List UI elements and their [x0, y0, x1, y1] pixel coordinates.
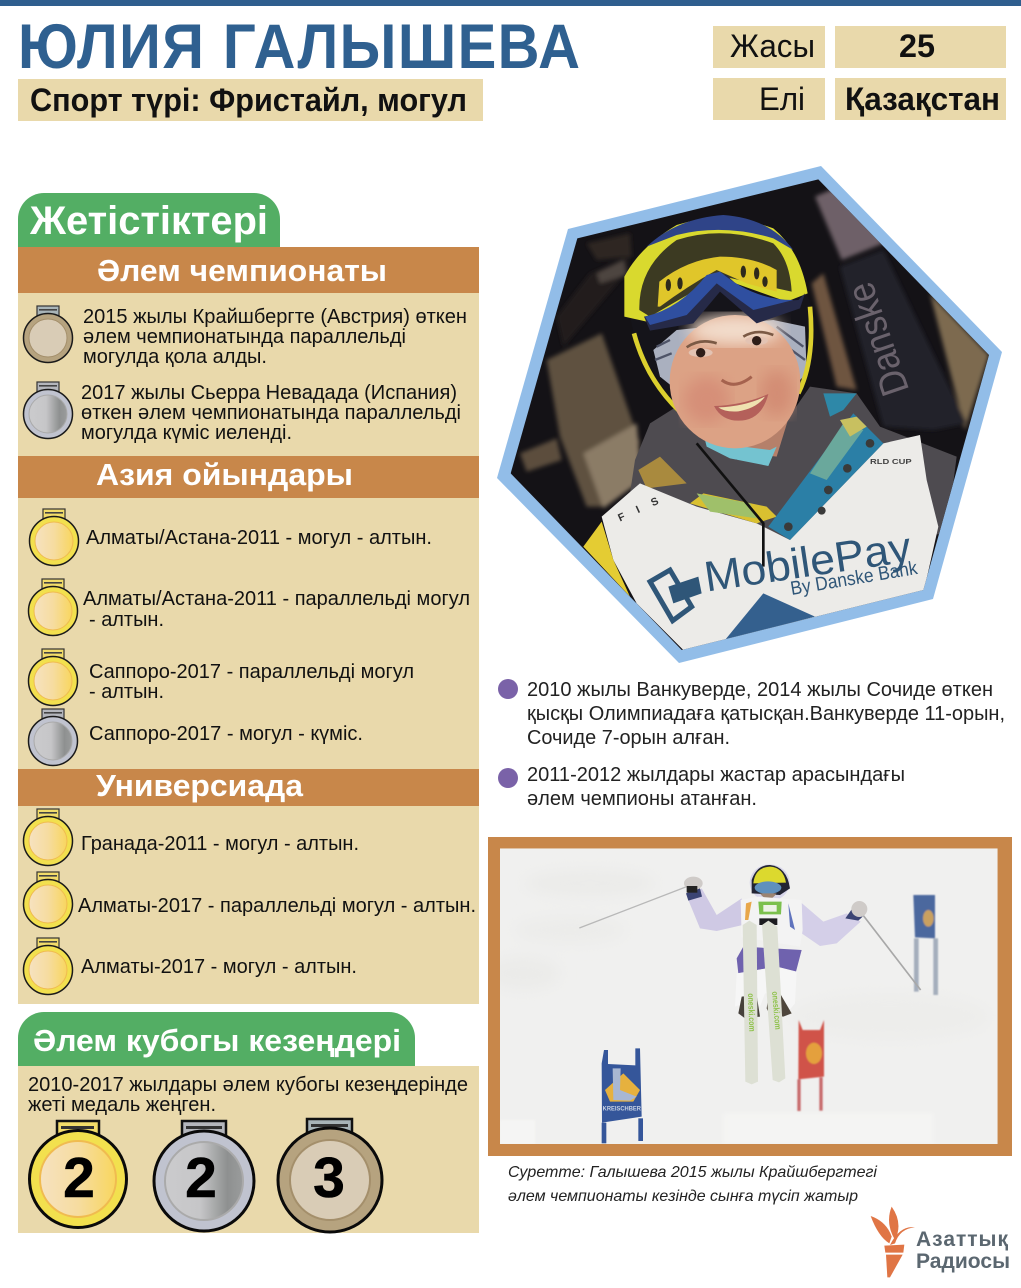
text: 2017 championship: өткен әлем чемпионатында параллельді [81, 402, 461, 424]
panel: achievements [18, 193, 479, 1004]
text: Sapporo parallel: Саппоро-2017 - параллельді могул [89, 661, 414, 683]
poles [579, 887, 687, 928]
section heading: Asian Games: Азия ойындары [96, 457, 353, 492]
text: 2015 championship: могулда қола алды. [83, 346, 267, 368]
heading tab: world cup: Әлем кубогы кезеңдері [33, 1023, 401, 1058]
text: world cup summary [28, 1074, 468, 1116]
medal: silver [28, 709, 78, 766]
medal: gold [28, 579, 78, 636]
text: Granada: Гранада-2011 - могул - алтын. [81, 833, 359, 855]
section heading: Universiade [18, 768, 479, 806]
pants [737, 947, 802, 973]
photo caption [508, 1164, 877, 1205]
info table: age and country: Қазақстан [845, 81, 1000, 117]
panel background [18, 293, 479, 1004]
ski branding: oneski.com [746, 993, 757, 1032]
text: 2017 championship: могулда күміс иеленді. [81, 422, 292, 444]
text: Sapporo parallel: - алтын. [89, 681, 164, 703]
medal: gold [24, 938, 72, 994]
skis [743, 921, 758, 1084]
torso and bib [741, 897, 803, 947]
text: world cup summary: 2010-2017 жылдары әлем кубогы кезеңдерінде [28, 1074, 468, 1096]
panel: world cup stages [18, 1012, 479, 1233]
mask [705, 441, 777, 466]
portrait photo in hexagon frame: By Danske Bank [789, 558, 919, 600]
text: Sapporo mogul: Саппоро-2017 - могул - күміс. [89, 723, 363, 745]
action photo with orange frame [487, 837, 1012, 1156]
nose [722, 377, 752, 384]
bullet: olympics: 2010 жылы Ванкуверде, 2014 жылы Сочиде өткен [527, 679, 993, 701]
photo background [510, 179, 989, 650]
zipper [697, 443, 763, 567]
text: Almaty/Astana mogul: Алматы/Астана-2011 - могул - алтын. [86, 527, 432, 549]
helmet strap [634, 307, 811, 412]
info table: age and country: Елі [759, 81, 805, 117]
text: 2015 championship: 2015 жылы Крайшбергте (Австрия) өткен [83, 306, 467, 328]
heading tab: achievements: Жетістіктері [29, 199, 268, 243]
medal: 3 bronze: 3 [313, 1146, 345, 1210]
neck [746, 420, 788, 457]
portrait photo in hexagon frame: RLD CUP [870, 457, 912, 466]
medal: 2 gold [30, 1121, 126, 1228]
section heading: world championship: Әлем чемпионаты [97, 253, 387, 288]
boots [738, 995, 760, 1018]
sport subtitle: Спорт түрі: Фристайл, могул [30, 82, 467, 118]
info table: age and country: 25 [899, 28, 935, 64]
gate blue with k logo: KREISCHBER [603, 1107, 642, 1113]
bullet: junior world champion: әлем чемпионы атанған. [527, 788, 757, 810]
text: Almaty parallel: Алматы-2017 - параллельді могул - алтын. [78, 895, 476, 917]
section heading: Universiade: Универсиада [96, 768, 304, 803]
gate red [797, 1020, 824, 1111]
collar patterned flap [768, 413, 883, 540]
medal: 2 silver [154, 1121, 254, 1231]
bullet: junior world champion [498, 764, 905, 810]
medal: 2 silver: 2 [185, 1146, 217, 1210]
text: Almaty/Astana parallel: - алтын. [89, 609, 164, 631]
logo: Azattyq Radiosy [871, 1207, 1010, 1277]
medal: gold [24, 809, 72, 866]
skier: oneski.com [770, 991, 783, 1030]
text: 2017 championship [81, 382, 461, 444]
MobilePay logo and text: MobilePay [701, 523, 915, 602]
heading tab: world cup [18, 1012, 415, 1066]
photo caption: Суретте: Галышева 2015 жылы Крайшбергтегі [508, 1164, 877, 1181]
eyes and brows [689, 348, 713, 357]
text: Almaty mogul: Алматы-2017 - могул - алтын. [81, 956, 357, 978]
medal: 2 gold: 2 [63, 1146, 95, 1210]
text: Sapporo parallel [89, 661, 414, 703]
arms [688, 888, 743, 931]
skier [684, 864, 867, 1084]
section heading: Asian Games [18, 456, 479, 498]
headband [653, 320, 807, 390]
medal: bronze 2015 [24, 306, 72, 362]
bullet: olympics: Сочиде 7-орын алған. [527, 727, 730, 749]
medal: gold [28, 649, 78, 706]
bullet: olympics: қысқы Олимпиадаға қатысқан.Ванкуверде 11-орын, [527, 703, 1005, 725]
bullet: olympics [498, 679, 1005, 749]
logo: Azattyq Radiosy: Радиосы [916, 1250, 1010, 1273]
banner lettering: Danske [838, 277, 918, 401]
jacket [630, 387, 957, 553]
goggles frame [624, 218, 808, 322]
text: Almaty/Astana parallel [83, 588, 470, 631]
goggle lens [639, 233, 792, 317]
text: 2017 championship: 2017 жылы Сьерра Невадада (Испания) [81, 382, 457, 404]
face [670, 315, 800, 448]
smile [714, 394, 768, 421]
gate blue with k logo [602, 1048, 643, 1143]
gloves [684, 877, 703, 890]
helmet back [630, 217, 815, 420]
goggle lower strap [644, 275, 805, 331]
bullet: junior world champion: 2011-2012 жылдары жастар арасындағы [527, 764, 905, 786]
snow background [500, 848, 998, 1144]
logo: Azattyq Radiosy: Азаттық [916, 1228, 1008, 1251]
portrait photo in hexagon frame [490, 160, 1010, 667]
text: 2015 championship [83, 306, 467, 368]
panel background [18, 1066, 479, 1233]
text: 2015 championship: әлем чемпионатында параллельді [83, 326, 406, 348]
top bar [0, 0, 1021, 6]
text: Almaty/Astana parallel: Алматы/Астана-2011 - параллельді могул [83, 588, 470, 610]
FIS and world cup marks: F I S [616, 495, 661, 524]
section heading: world championship [18, 247, 479, 293]
medal: gold [24, 872, 72, 928]
medal: silver 2017 [24, 382, 72, 438]
title: ЮЛИЯ ГАЛЫШЕВА [18, 11, 580, 81]
info table: age and country [713, 26, 1006, 120]
bib [602, 435, 938, 650]
info table: age and country: Жасы [730, 28, 815, 64]
icon: torch [871, 1207, 915, 1277]
text: world cup summary: жеті медаль жеңген. [28, 1094, 216, 1116]
medal: 3 bronze [278, 1119, 382, 1232]
photo caption: әлем чемпионаты кезінде сынға түсіп жатыр [508, 1188, 858, 1205]
hood and helmet [750, 864, 790, 901]
medal: gold [30, 509, 78, 566]
distant gate blue [913, 895, 938, 995]
